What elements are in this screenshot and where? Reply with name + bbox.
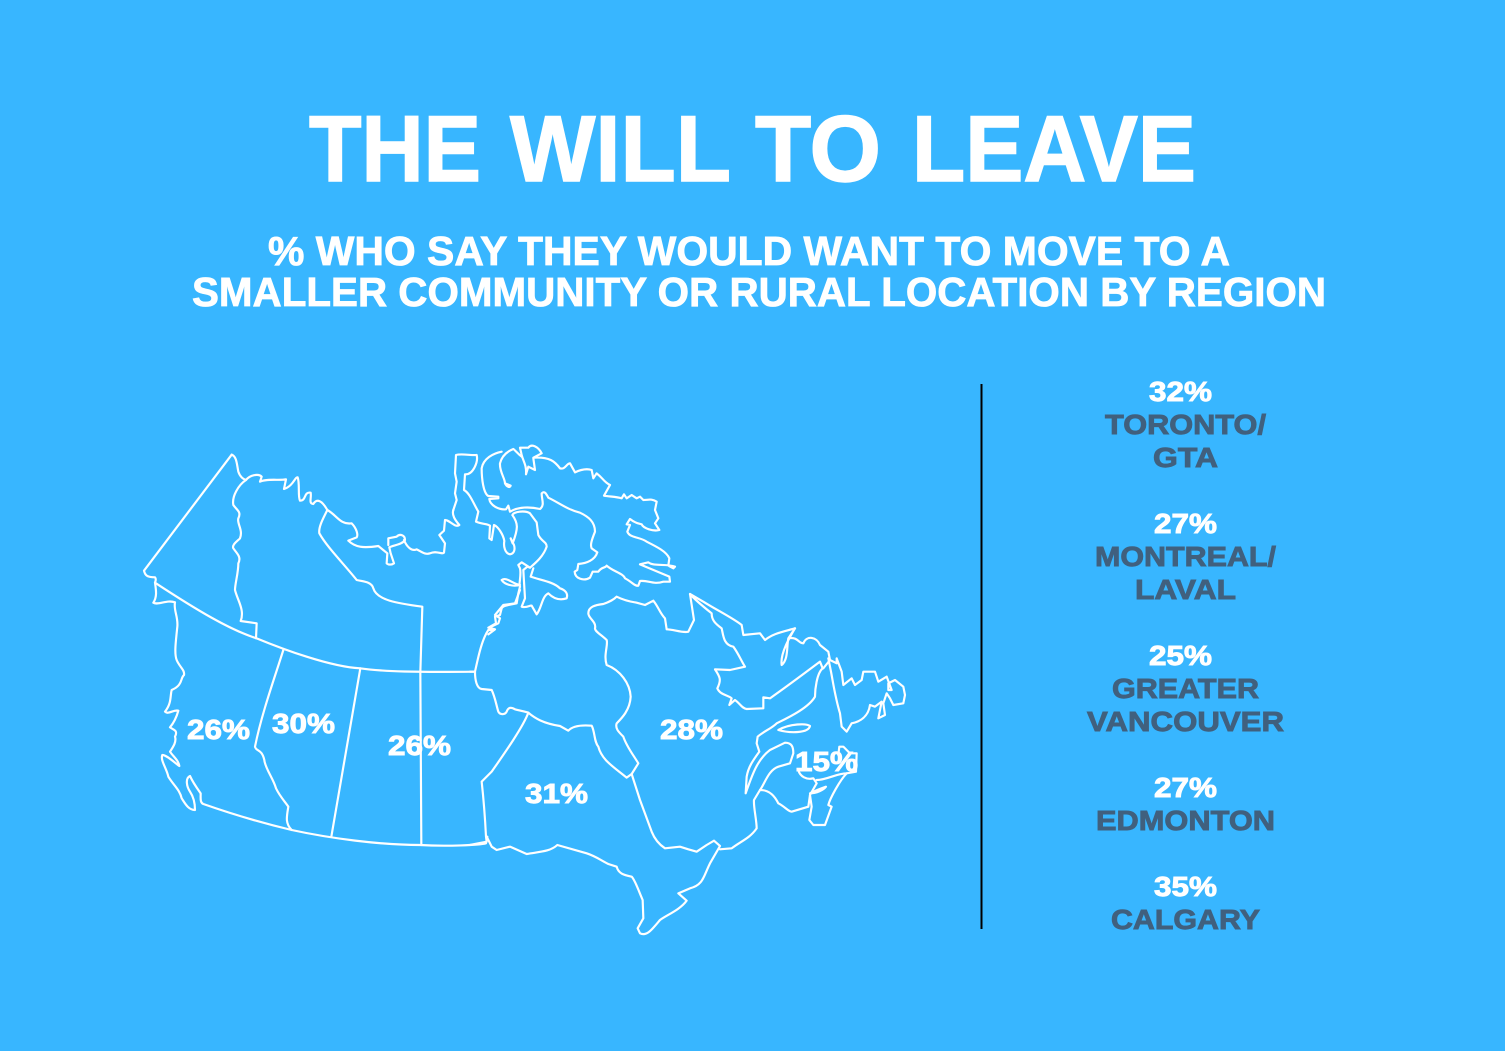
- subtitle: % WHO SAY THEY WOULD WANT TO MOVE TO A: [268, 228, 1230, 274]
- title: LEAVE: [912, 96, 1196, 201]
- city: Calgary: CALGARY: [1111, 904, 1260, 935]
- title: [309, 96, 1196, 201]
- city list: [1087, 376, 1284, 935]
- city: Toronto/GTA: [1105, 376, 1266, 473]
- label: Saskatchewan and Manitoba 26%: 26%: [388, 730, 451, 761]
- city: Edmonton: 27%: [1154, 772, 1217, 803]
- label: Alberta 30%: 30%: [272, 708, 335, 739]
- title: TO: [755, 96, 881, 201]
- city: Toronto/GTA: GTA: [1153, 442, 1218, 473]
- label: Atlantic 15%: 15%: [795, 746, 858, 777]
- title: WILL: [510, 96, 731, 201]
- city: Calgary: 35%: [1154, 871, 1217, 902]
- subtitle: [192, 228, 1326, 315]
- city: Montreal/Laval: MONTREAL/: [1095, 541, 1276, 572]
- label: Ontario 31%: 31%: [525, 778, 588, 809]
- city: Edmonton: [1096, 772, 1275, 836]
- label: British Columbia 26%: 26%: [187, 714, 250, 745]
- divider: [980, 384, 982, 929]
- city: Greater Vancouver: VANCOUVER: [1087, 706, 1284, 737]
- city: Toronto/GTA: 32%: [1149, 376, 1212, 407]
- city: Calgary: [1111, 871, 1260, 935]
- city: Greater Vancouver: GREATER: [1112, 673, 1259, 704]
- city: Montreal/Laval: [1095, 508, 1276, 605]
- city: Edmonton: EDMONTON: [1096, 805, 1275, 836]
- city: Greater Vancouver: [1087, 640, 1284, 737]
- title: THE: [309, 96, 481, 201]
- city: Greater Vancouver: 25%: [1149, 640, 1212, 671]
- map of Canada: [144, 446, 905, 934]
- city: Toronto/GTA: TORONTO/: [1105, 409, 1266, 440]
- label: Quebec 28%: 28%: [660, 714, 723, 745]
- subtitle: SMALLER COMMUNITY OR RURAL LOCATION BY REGION: [192, 269, 1326, 315]
- city: Montreal/Laval: LAVAL: [1135, 574, 1236, 605]
- city: Montreal/Laval: 27%: [1154, 508, 1217, 539]
